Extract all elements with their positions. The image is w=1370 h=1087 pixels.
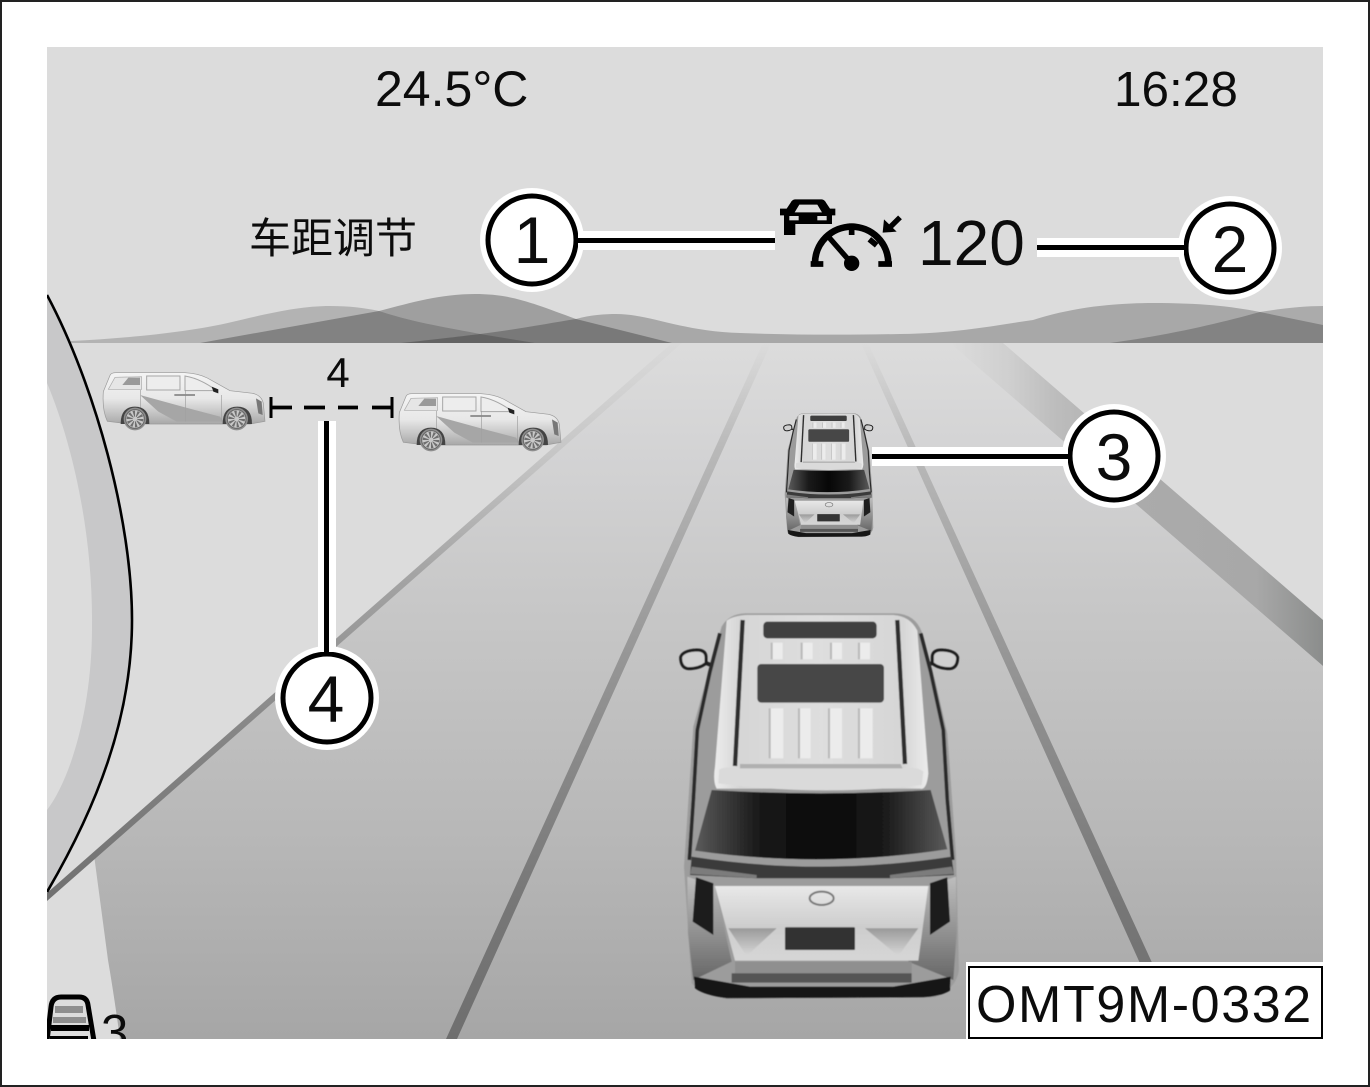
callout line 3 xyxy=(872,447,1070,466)
mountains on the horizon xyxy=(71,294,1323,343)
callout 4 xyxy=(275,646,379,750)
lead vehicle rear view xyxy=(784,413,873,537)
callout 2 xyxy=(1178,196,1282,300)
icon: gear or lane indicator xyxy=(47,997,94,1041)
road right edge xyxy=(950,343,1323,666)
callout line 4 xyxy=(318,421,336,654)
following distance scale xyxy=(271,397,392,418)
gear or level number: 3 xyxy=(101,1006,128,1060)
mode title: 车距调节 xyxy=(249,215,417,262)
road surface xyxy=(94,443,1323,1039)
lane line right xyxy=(876,374,1152,962)
icon: adaptive cruise car and gauge xyxy=(780,199,900,271)
callout 1: 1 xyxy=(514,203,550,277)
temperature: 24.5°C xyxy=(375,61,528,117)
callout 3 xyxy=(1062,404,1166,508)
callout 1 xyxy=(480,188,584,292)
left gauge arc xyxy=(47,295,132,892)
side view vehicle: lead xyxy=(399,394,561,451)
side view vehicle: ego xyxy=(103,373,265,430)
road left edge xyxy=(47,377,642,901)
callout 3: 3 xyxy=(1096,420,1132,494)
callout line 1 xyxy=(576,231,775,250)
ego vehicle rear view xyxy=(681,613,959,999)
callout 4: 4 xyxy=(308,662,344,736)
reference code box: OMT9M-0332 xyxy=(976,976,1313,1034)
callout line 2 xyxy=(1037,238,1186,257)
callout 2: 2 xyxy=(1212,212,1248,286)
lane line left xyxy=(446,343,771,1039)
set speed value: 120 xyxy=(918,207,1025,279)
clock: 16:28 xyxy=(1114,62,1238,117)
following distance value: 4 xyxy=(326,349,350,396)
